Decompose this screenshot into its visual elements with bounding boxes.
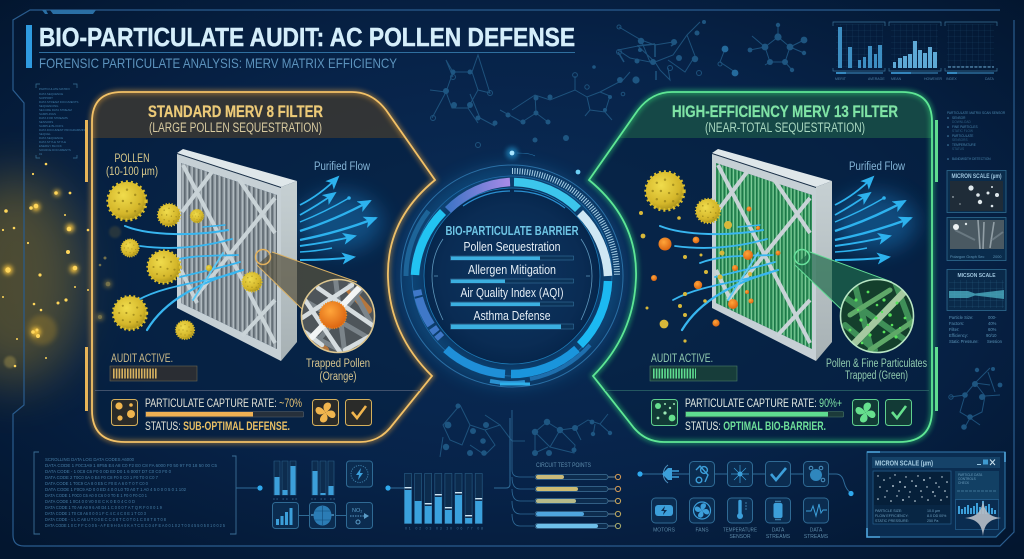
- icon: particle cluster: [804, 462, 828, 486]
- capture rate text: PARTICULATE CAPTURE RATE: 90%+: [685, 398, 842, 410]
- gauge heading: BIO-PARTICULATE BARRIER: [446, 224, 578, 238]
- side readout: CHECK: [958, 481, 970, 485]
- audit progress bar: [110, 366, 197, 381]
- pollen and fine particles: [639, 172, 780, 343]
- pollen label: [106, 153, 158, 178]
- icon: data streams 2: [804, 498, 829, 540]
- filter frame: [177, 149, 297, 361]
- molecule: small chain: [718, 46, 738, 76]
- metric: allergen mitigation: Allergen Mitigation: [468, 263, 556, 277]
- bottom bar chart: 01 02 03 03 30 06 77 08: [405, 526, 483, 530]
- right data text block: DOWNLOAD: [952, 120, 971, 124]
- chart 1: [833, 22, 885, 81]
- bottom data log: DATA CODE 1 F0C9 AD 0 0 ED 4 0 0 L0 T0 A0 T 1 A0 4 5 0 0 0 5 0 1 102: [45, 487, 186, 492]
- side accents: [935, 120, 938, 411]
- micron data list: Static Pressure:: [949, 339, 979, 344]
- metric: asthma defense: [450, 309, 574, 329]
- chart 1: AVERAGE: [868, 77, 885, 81]
- heading: STANDARD MERV 8 FILTER: [148, 103, 323, 121]
- window title bar: MICRON SCALE (µm): [875, 458, 933, 468]
- panel border: [92, 92, 435, 442]
- left data text block: SAMPLE BLOCKS: [39, 124, 63, 128]
- inner brackets: [432, 239, 592, 320]
- right data text block: SENSOR: [952, 116, 966, 120]
- metric: air quality index: [450, 286, 574, 306]
- metric: pollen sequestration: [450, 240, 574, 260]
- left data text block: DATA STYLE STYLE: [39, 140, 66, 144]
- glow dots: [506, 147, 580, 174]
- panel border glow: [92, 92, 435, 442]
- gauge glow: [412, 176, 612, 376]
- left data text block: SEQUENCING: [39, 104, 59, 108]
- icon row: components: [652, 498, 829, 540]
- heading: HIGH-EFFICIENCY MERV 13 FILTER: [672, 103, 898, 121]
- micron data list: Session: [987, 339, 1003, 344]
- side readout: [955, 471, 999, 500]
- chart 2: [889, 22, 943, 81]
- window frame: [867, 452, 1005, 537]
- icon: data streams 1: [766, 498, 791, 540]
- title: BIO-PARTICULATE AUDIT: AC POLLEN DEFENSE: [39, 22, 575, 52]
- panel: high-efficiency MERV 13 filter: [588, 92, 936, 442]
- icon: particles: [112, 400, 138, 426]
- side readout: CONTROLS: [958, 477, 976, 481]
- purified flow arrows: [835, 177, 911, 260]
- left data text block: SEQUEL: [39, 132, 51, 136]
- filter pleats: [181, 163, 277, 349]
- icon: burst: [728, 462, 752, 486]
- trapped particulates caption: [826, 358, 927, 382]
- metric: asthma defense: Asthma Defense: [474, 309, 551, 323]
- micron data list: 40%: [988, 321, 997, 326]
- micron waveform panel: MICSON SCALE: [958, 273, 996, 279]
- sparkle mark: [965, 500, 1001, 536]
- chart 3: DATA: [985, 77, 994, 81]
- side accents: [85, 120, 88, 411]
- bottom bar chart: [385, 418, 510, 530]
- molecule: centre ring chain: [500, 65, 630, 142]
- bottom data log: DATA CODE - 1 L C A8 U T 0 0 E C C 0 8 T C 0 T 0 1 C 0 8 T 8 T 0 8: [45, 517, 166, 522]
- scatter panel: 8.0 DD 00%: [927, 514, 947, 518]
- audit label: AUDIT ACTIVE.: [651, 353, 713, 365]
- icon: data streams 1: DATA: [772, 528, 785, 534]
- scatter panel: STATIC PRESSURE:: [875, 519, 909, 523]
- arrows glow: [833, 192, 917, 252]
- micron data list: 000-: [988, 315, 997, 320]
- left data text block: DATA STREAM DOCUMENTS: [39, 100, 78, 104]
- micron scale window: [867, 452, 1005, 537]
- outer rings: [401, 165, 623, 387]
- left data text block: SENSORS: [39, 120, 53, 124]
- right data text block: TEMPERATURE: [952, 143, 976, 147]
- top right mini charts: [833, 22, 997, 81]
- icon: temperature sensor: [723, 498, 758, 540]
- micron panel header and image 1: MICRON SCALE (µm): [952, 173, 1002, 180]
- chart 1: MERIT: [835, 77, 847, 81]
- bottom data log: DATA CODE 1 T0C9 CA 8 0 E5 C F0 E A 6 0 T 0 T C0 0: [45, 481, 148, 486]
- panel body: [589, 92, 932, 442]
- filter pleats: [716, 163, 812, 349]
- pollen particles: [108, 182, 262, 339]
- bottom data log: DATA CODE 1 T0 C8 A6 0 0 0 1 F C 4 C 4 C 0 E 1 T C0 3: [45, 511, 146, 516]
- micron data list: 60%: [988, 327, 997, 332]
- segment arcs: [415, 182, 608, 374]
- bottom data log: DATA CODE 1 F0C3A9 1 8F55 E4 A8 C0 F2 E0 C8 FA 6000 F0 50 97 F0 18 50 00 C5: [45, 463, 217, 468]
- side readout: PARTICLE DATA: [958, 473, 983, 477]
- molecule: top centre: [616, 20, 706, 84]
- right data text block: SENSORS: [952, 138, 968, 142]
- icon: lightning: [346, 461, 372, 487]
- magnifier: trapped pollen: [300, 275, 375, 355]
- panel border glow: [589, 92, 932, 442]
- left data text block: SECURE DATA STREAM: [39, 108, 72, 112]
- icon: plug: [662, 465, 679, 483]
- bottom mini bars: [272, 461, 372, 528]
- panel body: [92, 92, 435, 442]
- icon: check: [346, 400, 372, 426]
- icon row: upper circuit: [637, 462, 854, 496]
- icon: globe: [298, 502, 346, 528]
- title block: [26, 22, 575, 71]
- capture rate text: PARTICULATE CAPTURE RATE: ~70%: [145, 398, 302, 410]
- right data text block: PARTICULATE: [952, 134, 973, 138]
- metric: air quality index: Air Quality Index (AQI): [460, 286, 564, 300]
- left data text block: ENERGY BLOCK: [39, 144, 62, 148]
- circuit test points: [512, 410, 621, 529]
- scatter panel: 250 Pa: [927, 519, 938, 523]
- right data text block: BANDWIDTH DETECTION: [952, 157, 991, 161]
- micron waveform panel: [947, 270, 1006, 310]
- chart 3: INDEX: [946, 77, 957, 81]
- sub heading: (NEAR-TOTAL SEQUESTRATION): [705, 120, 865, 135]
- header band: [620, 93, 931, 138]
- top frame tabs: [42, 10, 96, 14]
- left data text block: SUPPORT: [39, 96, 53, 100]
- micron data list: 90/10: [986, 333, 997, 338]
- icon: data streams 1: STREAMS: [766, 534, 791, 540]
- purified flow label: Purified Flow: [314, 161, 371, 173]
- micron data list: Filter:: [949, 327, 959, 332]
- micron image 2: 2000: [993, 255, 1001, 259]
- bottom data log: DATA CODE 1 T0 A8 A0 9 6 A0 D4 1 C 0 0 0 T A T Q R F 0 0 0 1 9: [45, 505, 162, 510]
- panel border: [589, 92, 932, 442]
- pollen label: POLLEN: [114, 153, 150, 165]
- circuit test points: CIRCUIT TEST POINTS: [536, 463, 591, 469]
- icon: fans: FANS: [695, 528, 709, 534]
- icon: signal bars: [272, 502, 298, 528]
- title accent bar: [26, 25, 32, 68]
- metric: allergen mitigation: [450, 263, 574, 283]
- background molecules: [430, 20, 1002, 457]
- icon: motors: [652, 498, 676, 534]
- capture rate bar: [686, 412, 844, 417]
- molecule: upper left of centre: [430, 55, 510, 148]
- bottom data log: DATA CODE 1 0 C F F C 0 0 5 - A F E 9 H 0 A 0 K A T C E C 0 4 F E A 0 0 1 0 2 T 0 0 4 5 5 0 5 0 1 0 0 2 5: [45, 523, 225, 528]
- bottom data log: DATA CODE 1 0C4 0 0 V0 0 E C K 0 E 0 4 C 0 D: [45, 499, 136, 504]
- left data text block: DATA SEQUENCE: [39, 92, 63, 96]
- molecule: lower right: [949, 367, 1002, 430]
- right panel: micron scale images: [947, 170, 1006, 344]
- gold particle field: [0, 163, 121, 385]
- status text: STATUS: OPTIMAL BIO-BARRIER.: [685, 421, 826, 433]
- molecule: lower centre right: [532, 414, 612, 456]
- scatter panel: FLOW EFFICIENCY:: [875, 514, 909, 518]
- chart 3: [945, 22, 997, 81]
- scatter panel: PARTICLE SIZE:: [875, 509, 902, 513]
- filter frame: [712, 149, 832, 361]
- panel: standard MERV 8 filter: [86, 92, 437, 442]
- left data text block: 01: [39, 152, 43, 156]
- icon: data streams 2: STREAMS: [804, 534, 829, 540]
- audit progress bar: [650, 366, 737, 381]
- pollen label: (10-100 µm): [106, 166, 158, 178]
- icon: molecule cluster: [690, 462, 714, 486]
- bottom data log: [34, 452, 263, 534]
- metric: pollen sequestration: Pollen Sequestration: [464, 240, 561, 254]
- icon: temperature sensor: TEMPERATURE: [723, 528, 758, 534]
- bottom data log: SCROLLING DATA LOG DATA CODES A6000: [45, 457, 134, 462]
- icon: NO2 flow: NO₂: [352, 508, 362, 514]
- right data text block: STATUS: [952, 147, 964, 151]
- trapped pollen caption: [306, 358, 370, 383]
- subtitle: FORENSIC PARTICULATE ANALYSIS: MERV MATRIX EFFICIENCY: [39, 55, 398, 71]
- icon: fans: [690, 498, 714, 534]
- centre gauge: bio-particulate barrier: [401, 147, 623, 387]
- icon: fan: [852, 400, 878, 426]
- status text: STATUS: SUB-OPTIMAL DEFENSE.: [145, 421, 290, 433]
- right data text block: [947, 111, 1006, 161]
- left data text block: DATA SEQUENCE: [39, 136, 63, 140]
- right data text block: PARTICULATE MATRIX SCAN SENSOR: [947, 111, 1006, 115]
- trapped pollen caption: Trapped Pollen: [306, 358, 370, 370]
- left data text block: DATA FOR STREAMS: [39, 116, 68, 120]
- trapped pollen caption: (Orange): [320, 371, 357, 383]
- icon: fan: [312, 400, 338, 426]
- scatter panel: 10.0 µm: [927, 509, 940, 513]
- side histogram: [956, 500, 998, 530]
- micron data list: Particle Size:: [949, 315, 973, 320]
- icon: particles: [652, 400, 678, 426]
- arrows glow: [298, 192, 382, 252]
- icon: temperature sensor: SENSOR: [729, 534, 751, 540]
- chart 2: HOWEVER: [924, 77, 943, 81]
- micron data list: [949, 315, 1003, 344]
- tick arc: [512, 171, 617, 276]
- bottom data log: DATA CODE 2 T0C0 0A 0 E4 F0 C8 F0 0 C0 1 F0 T0 0 C0 7: [45, 475, 158, 480]
- icon: motors: MOTORS: [653, 528, 676, 534]
- purified flow arrows: [300, 177, 376, 260]
- left data text block: SAMPLINGS: [39, 112, 56, 116]
- header band: [93, 93, 404, 138]
- magnifier connection: [256, 250, 357, 310]
- bottom data log: DATA CODE 1 F0C0 C6 A0 0 C6 0 0 T0 E 1 F0 0 F0 C0 1: [45, 493, 147, 498]
- icon: data streams 2: DATA: [810, 528, 823, 534]
- molecule: lower centre left: [440, 404, 525, 457]
- micron image 2: Polargon Graph Sec: [950, 255, 985, 259]
- chart 2: MEAN: [891, 77, 902, 81]
- capture rate bar: [146, 412, 304, 417]
- trapped particulates caption: Pollen & Fine Particulates: [826, 358, 927, 370]
- scatter panel: [873, 471, 951, 524]
- magnifier: trapped fine particles: [840, 280, 915, 352]
- micron data list: Factors:: [949, 321, 964, 326]
- left data text block: PARTICULATE MATRIX: [39, 87, 70, 91]
- lower outer arcs: [490, 345, 590, 384]
- micron image 2: [947, 218, 1006, 260]
- gauge disc: [424, 188, 600, 364]
- audit label: AUDIT ACTIVE.: [111, 353, 173, 365]
- left data text block: DATA DOCUMENT PROGRAMMING: [39, 128, 88, 132]
- left data text block: SOURCE DOCUMENTS: [39, 148, 71, 152]
- icon: check: [766, 462, 790, 486]
- air flow lines: [125, 225, 243, 330]
- purified flow label: Purified Flow: [849, 161, 906, 173]
- bottom data log: DATA CODE - 1 0C8 C6 F0 0 0D E0 D0 1 6 0007 D7 C0 C0 F0 0: [45, 469, 171, 474]
- mini bar group 1: 00 00 00: [273, 497, 297, 501]
- trapped particulates caption: Trapped (Green): [845, 370, 908, 382]
- mini bar group 2: 00 00 00: [311, 497, 335, 501]
- right data text block: FINE PARTICLES: [952, 125, 978, 129]
- right data text block: STATIC FLOW: [952, 129, 973, 133]
- magnifier connection: [794, 250, 892, 310]
- micron data list: Efficiency:: [949, 333, 968, 338]
- air flow lines: [660, 225, 778, 330]
- micron panel header and image 1: [947, 170, 1006, 212]
- molecule: hexagon top: [748, 23, 807, 72]
- left data text block: [36, 84, 88, 158]
- sub heading: (LARGE POLLEN SEQUESTRATION): [149, 120, 322, 135]
- icon: check: [886, 400, 912, 426]
